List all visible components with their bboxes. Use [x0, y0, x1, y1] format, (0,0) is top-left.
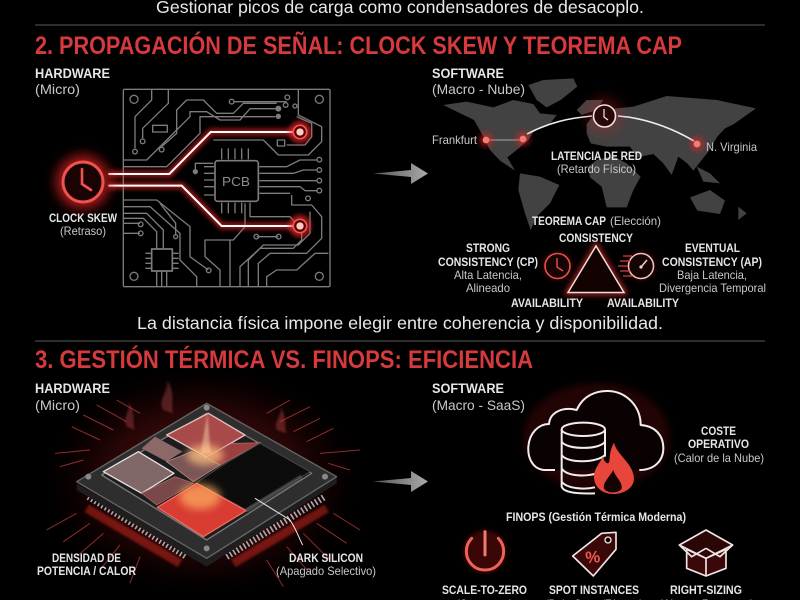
label: hardware micro [35, 66, 110, 97]
label: dark silicon [276, 551, 376, 578]
label: hardware micro section 3: (Micro) [35, 397, 80, 413]
label: software macro saas [432, 381, 525, 413]
callout line [255, 498, 303, 545]
label: dark silicon: (Apagado Selectivo) [276, 564, 376, 578]
label: teorema cap [532, 214, 661, 228]
labels: availability: AVAILABILITY [511, 296, 583, 310]
label: software macro nube [432, 66, 525, 97]
label: densidad de potencia [37, 551, 136, 578]
label: software macro saas: (Macro - SaaS) [432, 397, 525, 413]
text: eventual consistency: Baja Latencia, [677, 268, 747, 282]
icon: right-sizing box [679, 530, 733, 576]
label: right-sizing [659, 583, 754, 600]
circuit board diagram: PCB [222, 174, 250, 189]
label: software macro nube: (Macro - Nube) [432, 81, 525, 97]
label: clock skew: CLOCK SKEW [49, 211, 118, 225]
label: coste operativo: (Calor de la Nube) [674, 451, 764, 465]
label: latencia de red [551, 149, 642, 176]
label: right-sizing: RIGHT-SIZING [670, 583, 742, 597]
text: eventual consistency: EVENTUAL [685, 241, 740, 255]
heading: section 2: 2. PROPAGACIÓN DE SEÑAL: CLOCK SKEW Y TEOREMA CAP [35, 30, 682, 60]
icon: spot instances tag: % [585, 547, 601, 567]
label: clock skew [49, 211, 118, 238]
CAP triangle [568, 246, 624, 292]
world map [443, 78, 756, 230]
labels: availability [511, 296, 679, 310]
label: hardware micro section 3 [35, 381, 110, 413]
arrow: hardware to software [373, 163, 428, 184]
package [77, 477, 337, 567]
label: hardware micro: (Micro) [35, 81, 80, 97]
icon: cloud database with flame [523, 383, 670, 494]
section 2 statement: La distancia física impone elegir entre coherencia y disponibilidad. [137, 313, 663, 333]
pins [88, 497, 325, 557]
processor chip illustration [47, 367, 360, 593]
circuit board diagram [108, 89, 330, 287]
label: densidad de potencia: POTENCIA / CALOR [37, 564, 136, 578]
label: software macro nube: SOFTWARE [432, 66, 504, 81]
latency arc with clock [479, 97, 704, 151]
icon: eventual consistency gauge [618, 252, 655, 280]
label: consistency: CONSISTENCY [559, 231, 633, 245]
text: eventual consistency [659, 241, 766, 295]
text: eventual consistency: CONSISTENCY (AP) [662, 255, 762, 269]
text: strong consistency: Alineado [466, 281, 510, 295]
label: dark silicon: DARK SILICON [289, 551, 363, 565]
label: latencia de red: (Retardo Físico) [557, 162, 636, 176]
label: coste operativo [674, 424, 764, 465]
label: densidad de potencia: DENSIDAD DE [52, 551, 121, 565]
label: N. Virginia: N. Virginia [706, 140, 757, 154]
label: latencia de red: LATENCIA DE RED [551, 149, 642, 163]
arrow: hardware to software section 3 [373, 471, 428, 492]
heading: finops: FINOPS (Gestión Térmica Moderna) [506, 510, 686, 524]
text: strong consistency: CONSISTENCY (CP) [438, 255, 538, 269]
label: Frankfurt: Frankfurt [432, 133, 478, 147]
label: scale-to-zero: SCALE-TO-ZERO [442, 583, 527, 597]
label: software macro saas: SOFTWARE [432, 381, 504, 396]
label: hardware micro: HARDWARE [35, 66, 110, 81]
heading: section 3: 3. GESTIÓN TÉRMICA VS. FINOPS: EFICIENCIA [35, 344, 533, 374]
label: coste operativo: COSTE [701, 424, 736, 438]
icon: clock skew clock [56, 155, 110, 209]
text: strong consistency: STRONG [466, 241, 510, 255]
icon: strong consistency clock [544, 252, 572, 280]
label: coste operativo: OPERATIVO [688, 437, 749, 451]
die [102, 413, 312, 540]
label: teorema cap: TEOREMA CAP [532, 214, 606, 228]
blocks [167, 413, 245, 457]
label: teorema cap: (Elección) [610, 214, 661, 228]
label: hardware micro section 3: HARDWARE [35, 381, 110, 396]
label: spot instances: SPOT INSTANCES [549, 583, 639, 597]
text: eventual consistency: Divergencia Temporal [659, 281, 766, 295]
icon: scale-to-zero power [463, 530, 507, 573]
labels: availability: AVAILABILITY [607, 296, 679, 310]
label: clock skew: (Retraso) [60, 224, 106, 238]
text: strong consistency: Alta Latencia, [454, 268, 522, 282]
text: strong consistency [438, 241, 538, 295]
icon: spot instances tag [573, 532, 616, 576]
